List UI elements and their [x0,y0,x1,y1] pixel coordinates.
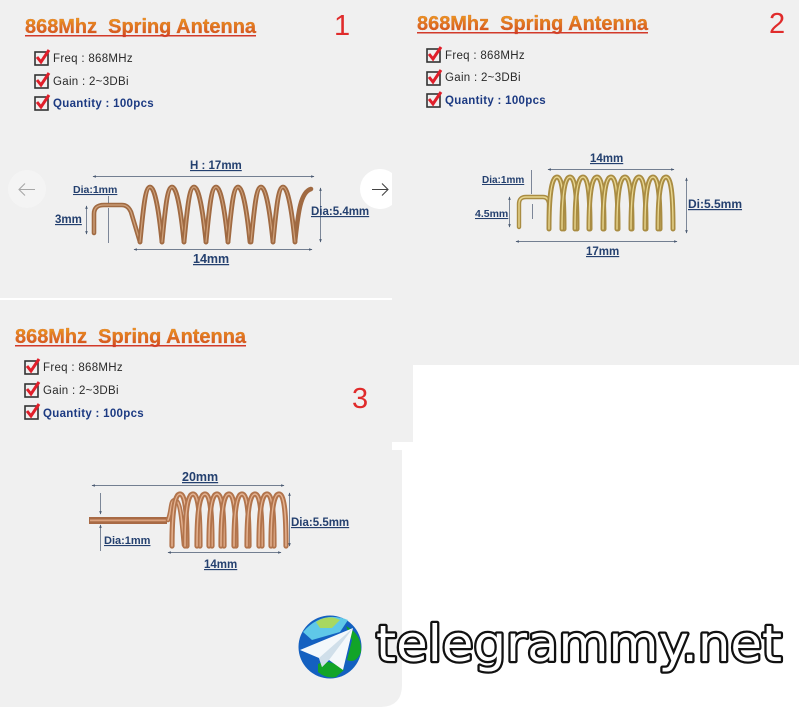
dimension labels 2: Dia:1mm [482,175,524,186]
heading 3: 868Mhz Spring Antenna [15,326,247,348]
panel 1: antenna 17mm [8,10,392,266]
heading 2: 868Mhz Spring Antenna [417,13,649,35]
spec list 3: Quantity : 100pcs [43,408,144,420]
spec list 3: Gain : 2~3DBi [43,385,119,397]
spring antenna 3 [89,494,286,546]
number 3: 3 [352,383,368,415]
spec list 2: Gain : 2~3DBi [445,72,521,84]
spec list 1: Freq : 868MHz [53,53,133,65]
dimension labels 1: 3mm [55,214,82,226]
number 2: 2 [769,8,785,40]
dimension labels 2 [475,153,742,258]
next arrow [360,169,392,209]
dimension labels 1: Dia:5.4mm [311,206,369,218]
dimension labels 2: Di:5.5mm [688,197,742,211]
dimension labels 1 [55,160,369,266]
dimension labels 1: 14mm [193,252,229,266]
dimension labels 1: H : 17mm [190,160,242,172]
dimension labels 3: Dia:5.5mm [291,517,349,529]
spec list 2: Quantity : 100pcs [445,95,546,107]
dimension lines 3 [92,486,290,552]
dimension lines 1 [86,176,320,250]
divider [0,298,392,300]
dimension lines 2 [510,170,686,242]
dimension labels 3: 14mm [204,559,237,571]
previous arrow [8,170,46,208]
spec list 1: Gain : 2~3DBi [53,76,129,88]
spring antenna 1 [94,187,311,242]
spec list 2 [427,47,546,107]
spec list 3: Freq : 868MHz [43,362,123,374]
dimension labels 3: Dia:1mm [104,535,151,547]
panel 2: antenna brass [417,8,785,258]
dimension labels 3: 20mm [182,470,218,484]
dimension labels 2: 17mm [586,246,619,258]
heading 1: 868Mhz Spring Antenna [25,16,257,38]
dimension labels 3 [104,470,349,571]
spec list 3 [25,359,144,420]
spec list 1 [35,50,154,110]
dimension labels 1: Dia:1mm [73,184,117,196]
spec list 1: Quantity : 100pcs [53,98,154,110]
watermark logo [298,615,782,678]
spec list 2: Freq : 868MHz [445,50,525,62]
icon: telegram globe [298,616,362,678]
panel 3: antenna straight lead [15,326,368,571]
number 1: 1 [334,10,350,42]
wordmark: telegrammy.net [376,615,782,673]
dimension labels 2: 4.5mm [475,208,508,220]
spring antenna 2 [519,177,673,229]
dimension labels 2: 14mm [590,153,623,165]
